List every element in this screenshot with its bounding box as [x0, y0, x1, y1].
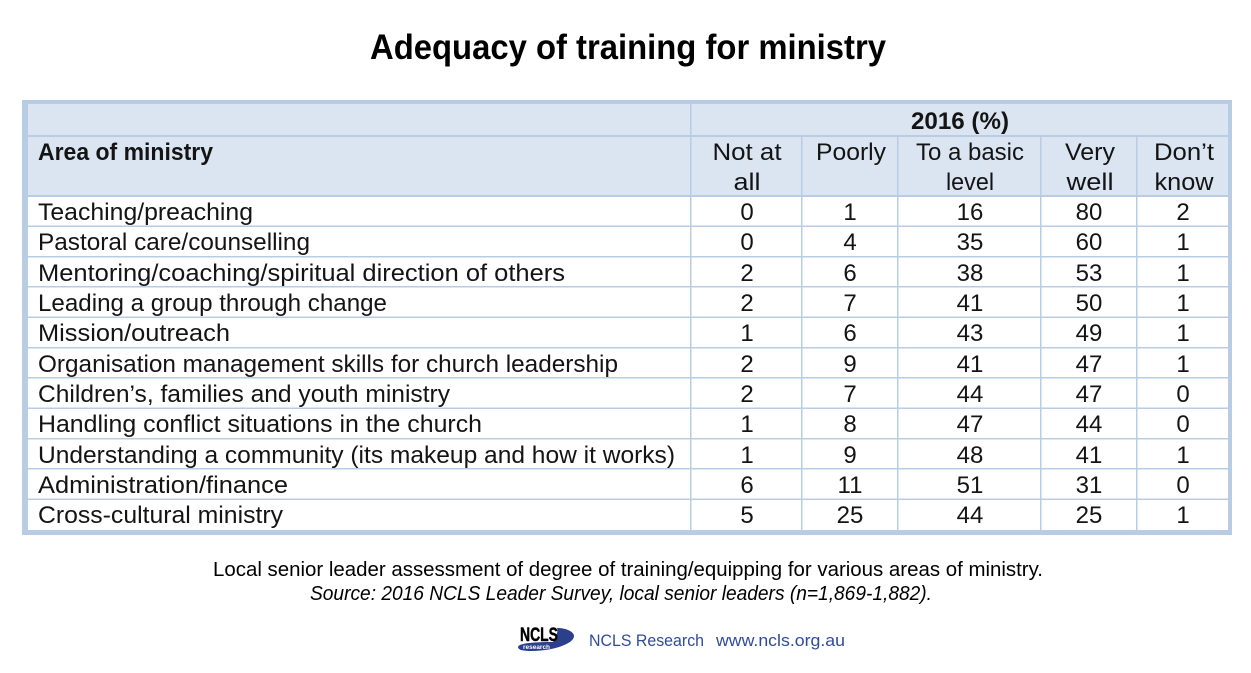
row: Understanding a community: 41: [1076, 442, 1102, 469]
table header: response columns: Don’t: [1154, 139, 1214, 166]
row: Leading a group through change: 1: [1176, 290, 1190, 317]
row: Teaching/preaching: 0: [740, 199, 754, 226]
row: Mission/outreach: [38, 320, 1190, 347]
row: Pastoral care/counselling: 35: [957, 229, 983, 256]
row: Mission/outreach: 49: [1076, 320, 1102, 347]
row: Cross-cultural ministry: Cross-cultural ministry: [38, 502, 283, 529]
table header: area of ministry: Area of ministry: [38, 139, 214, 166]
row: Mentoring/coaching/spiritual direction of others: [38, 260, 1190, 287]
row: Mission/outreach: 6: [843, 320, 857, 347]
row: Cross-cultural ministry: 5: [740, 502, 754, 529]
row: Handling conflict situations in the church: 47: [957, 411, 983, 438]
row: Children's, families and youth ministry: [38, 381, 1190, 408]
row: Children's, families and youth ministry: 7: [843, 381, 857, 408]
row: Handling conflict situations in the church: 0: [1176, 411, 1190, 438]
row: Mentoring/coaching/spiritual direction of others: 6: [843, 260, 857, 287]
row: Pastoral care/counselling: 4: [843, 229, 857, 256]
row: Handling conflict situations in the church: Handling conflict situations in the church: [38, 411, 482, 438]
row: Organisation management skills for church leadership: Organisation management skills for church leadership: [38, 351, 618, 378]
footer organisation name: NCLS Research: [589, 631, 704, 650]
row: Pastoral care/counselling: 60: [1076, 229, 1102, 256]
row: Pastoral care/counselling: 1: [1176, 229, 1190, 256]
table header: response columns: all: [734, 169, 760, 196]
row: Administration/finance: 11: [838, 472, 862, 499]
row: Mentoring/coaching/spiritual direction of others: Mentoring/coaching/spiritual direction of others: [38, 260, 565, 287]
row: Mentoring/coaching/spiritual direction of others: 38: [957, 260, 983, 287]
row: Handling conflict situations in the church: 44: [1076, 411, 1102, 438]
row: Teaching/preaching: 1: [843, 199, 857, 226]
row: Pastoral care/counselling: [38, 229, 1190, 256]
footer website: www.ncls.org.au: [715, 631, 845, 650]
table header: response columns: Poorly: [816, 139, 886, 166]
row: Children's, families and youth ministry: Children’s, families and youth ministry: [38, 381, 450, 408]
row: Pastoral care/counselling: 0: [740, 229, 754, 256]
row: Leading a group through change: 2: [740, 290, 754, 317]
row: Children's, families and youth ministry: 44: [957, 381, 983, 408]
row: Teaching/preaching: 80: [1076, 199, 1102, 226]
row: Understanding a community: 48: [957, 442, 983, 469]
row: Children's, families and youth ministry: 47: [1076, 381, 1102, 408]
icon: NCLS logo: NCLS: [520, 625, 558, 646]
row: Understanding a community: 9: [843, 442, 857, 469]
row: Understanding a community: Understanding a community (its makeup and how it works): [38, 442, 675, 469]
row: Understanding a community: 1: [1176, 442, 1190, 469]
row: Leading a group through change: Leading a group through change: [38, 290, 387, 317]
row: Cross-cultural ministry: 1: [1176, 502, 1190, 529]
table header: response columns: To a basic: [916, 139, 1024, 166]
panel: ministry training table: [22, 100, 1232, 535]
table header: response columns: well: [1065, 169, 1114, 196]
row: Organisation management skills for church leadership: 2: [740, 351, 754, 378]
row: Administration/finance: [38, 472, 1190, 499]
row: Administration/finance: 51: [957, 472, 983, 499]
row: Administration/finance: 31: [1076, 472, 1102, 499]
row: Leading a group through change: [38, 290, 1190, 317]
row: Mission/outreach: 1: [740, 320, 754, 347]
row: Handling conflict situations in the church: 8: [843, 411, 857, 438]
row: Mission/outreach: Mission/outreach: [38, 320, 230, 347]
row: Organisation management skills for church leadership: 9: [843, 351, 857, 378]
row: Cross-cultural ministry: 44: [957, 502, 983, 529]
table header: year group: 2016 (%): [911, 108, 1009, 135]
row: Teaching/preaching: 16: [957, 199, 983, 226]
row: Mission/outreach: 43: [957, 320, 983, 347]
row: Cross-cultural ministry: [38, 502, 1190, 529]
table header: response columns: [712, 139, 1214, 196]
row: Organisation management skills for church leadership: [38, 351, 1190, 378]
row: Children's, families and youth ministry: 0: [1176, 381, 1190, 408]
row: Leading a group through change: 50: [1076, 290, 1102, 317]
row: Mission/outreach: 1: [1176, 320, 1190, 347]
row: Organisation management skills for church leadership: 47: [1076, 351, 1102, 378]
caption: Local senior leader assessment of degree of training/equipping for various areas of ministry.: [213, 559, 1043, 581]
row: Leading a group through change: 7: [843, 290, 857, 317]
row: Teaching/preaching: Teaching/preaching: [38, 199, 253, 226]
row: Understanding a community: [38, 442, 1190, 469]
source note: Source: 2016 NCLS Leader Survey, local senior leaders (n=1,869-1,882).: [310, 583, 932, 605]
title: Adequacy of training for ministry: [370, 28, 886, 67]
row: Handling conflict situations in the church: 1: [740, 411, 754, 438]
table header: response columns: know: [1154, 169, 1214, 196]
row: Administration/finance: 0: [1176, 472, 1190, 499]
row: Administration/finance: 6: [740, 472, 754, 499]
table header: response columns: Very: [1065, 139, 1115, 166]
table header: response columns: level: [946, 169, 994, 196]
row: Teaching/preaching: 2: [1176, 199, 1190, 226]
row: Organisation management skills for church leadership: 1: [1176, 351, 1190, 378]
row: Cross-cultural ministry: 25: [1076, 502, 1102, 529]
row: Organisation management skills for church leadership: 41: [957, 351, 983, 378]
row: Cross-cultural ministry: 25: [837, 502, 863, 529]
row: Pastoral care/counselling: Pastoral care/counselling: [38, 229, 310, 256]
table background and frame: [22, 100, 1232, 535]
row: Teaching/preaching: [38, 199, 1190, 226]
row: Leading a group through change: 41: [957, 290, 983, 317]
row: Mentoring/coaching/spiritual direction of others: 2: [740, 260, 754, 287]
row: Mentoring/coaching/spiritual direction of others: 1: [1176, 260, 1190, 287]
row: Administration/finance: Administration/finance: [38, 472, 288, 499]
table header: response columns: Not at: [712, 139, 782, 166]
row: Handling conflict situations in the church: [38, 411, 1190, 438]
row: Children's, families and youth ministry: 2: [740, 381, 754, 408]
row: Mentoring/coaching/spiritual direction of others: 53: [1076, 260, 1102, 287]
icon: NCLS logo: research: [523, 644, 550, 651]
row: Understanding a community: 1: [740, 442, 754, 469]
